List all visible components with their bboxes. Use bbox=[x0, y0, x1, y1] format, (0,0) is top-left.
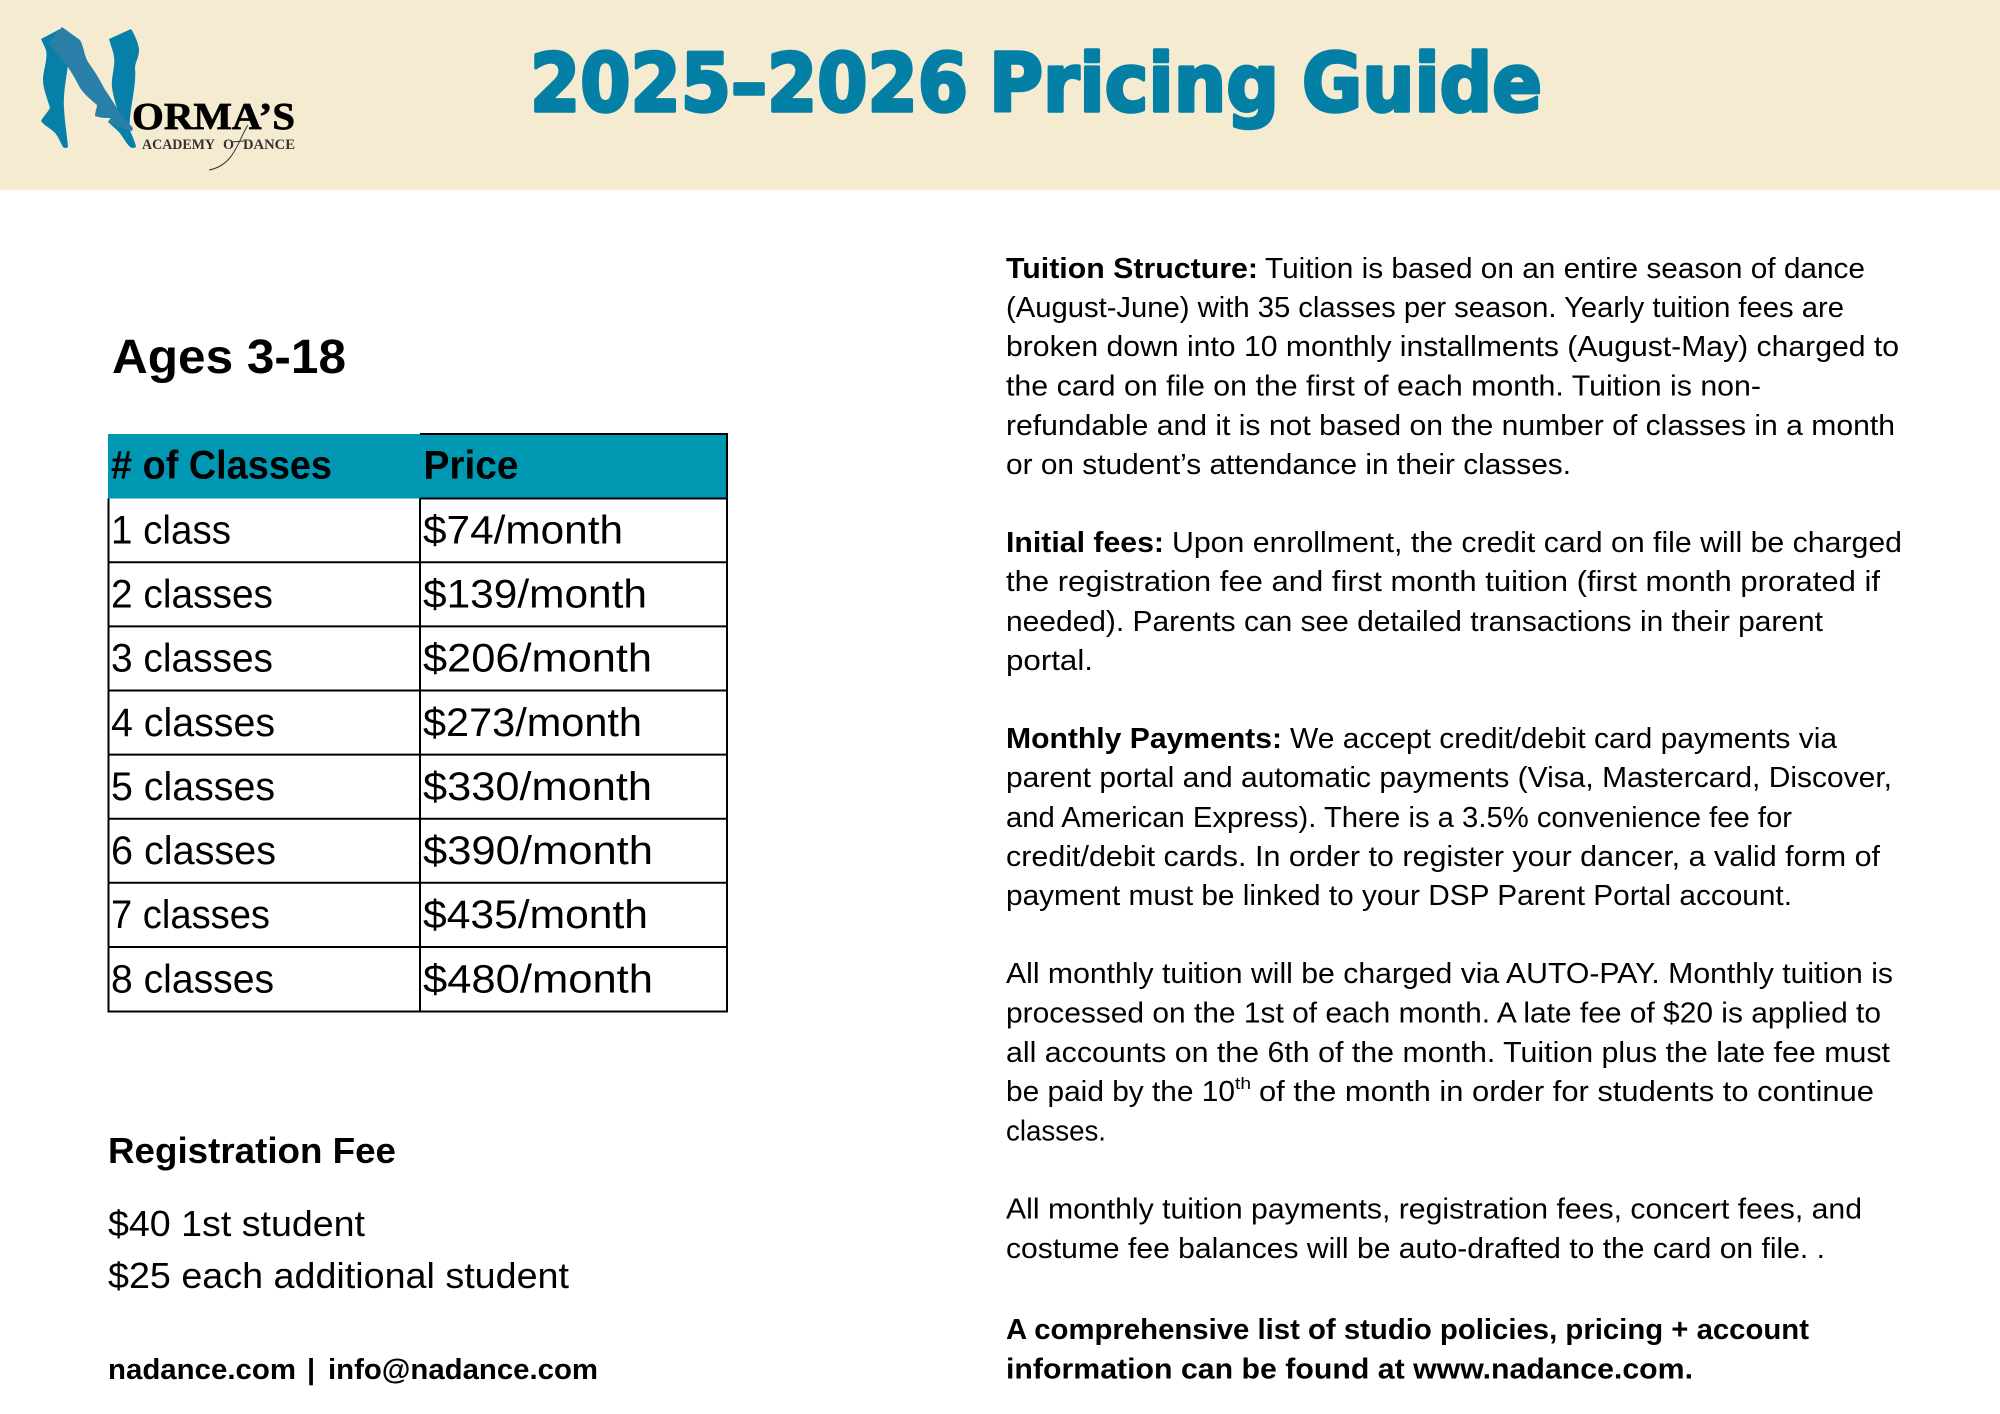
table header row bbox=[108, 434, 727, 498]
text block: monthly payments: credit/debit cards. In order to register your dancer, a valid form of bbox=[1006, 841, 1881, 873]
logo: Norma's Academy of Dance: O bbox=[223, 137, 234, 153]
text block: tuition structure: or on student’s attendance in their classes. bbox=[1006, 449, 1571, 481]
contact line: | bbox=[307, 1354, 315, 1386]
table rows: 4 classes bbox=[111, 701, 275, 745]
text block: policies note: A comprehensive list of studio policies, pricing + account bbox=[1006, 1314, 1809, 1346]
table rows: $139/month bbox=[423, 573, 647, 617]
text block: tuition structure: Tuition Structure: bbox=[1006, 253, 1258, 285]
text block: auto-draft: costume fee balances will be auto-drafted to the card on file. . bbox=[1006, 1233, 1825, 1265]
table rows: $480/month bbox=[423, 957, 653, 1001]
table rows: $330/month bbox=[423, 765, 652, 809]
table rows: 1 class bbox=[111, 508, 231, 552]
text block: tuition structure: broken down into 10 monthly installments (August-May) charged to bbox=[1006, 331, 1899, 363]
table header row: Price bbox=[424, 444, 518, 488]
table header row: # of Classes bbox=[111, 444, 332, 488]
logo: Norma's Academy of Dance: ACADEMY bbox=[142, 137, 215, 153]
heading: ages: Ages 3-18 bbox=[112, 331, 346, 384]
table rows: $273/month bbox=[423, 701, 642, 745]
title: Guide bbox=[1302, 37, 1542, 130]
table rows: 6 classes bbox=[111, 829, 276, 873]
table rows: 8 classes bbox=[111, 957, 274, 1001]
table rows: 2 classes bbox=[111, 573, 273, 617]
text block: initial fees bbox=[1006, 527, 1902, 677]
table grid bbox=[108, 498, 727, 1012]
table rows: 3 classes bbox=[111, 637, 273, 681]
text block: tuition structure: (August-June) with 35 classes per season. Yearly tuition fees are bbox=[1006, 292, 1844, 324]
registration fee: $40 1st student bbox=[108, 1203, 365, 1244]
title: Pricing bbox=[989, 37, 1279, 130]
registration fee bbox=[108, 1130, 569, 1296]
text block: tuition structure bbox=[1006, 253, 1899, 481]
logo: Norma's Academy of Dance: DANCE bbox=[243, 137, 295, 153]
text block: tuition structure: Tuition is based on an entire season of dance bbox=[1265, 253, 1865, 285]
text block: auto-draft bbox=[1006, 1193, 1862, 1265]
text block: auto-pay: processed on the 1st of each month. A late fee of $20 is applied to bbox=[1006, 997, 1881, 1029]
pricing table bbox=[108, 434, 727, 1012]
text block: auto-pay: classes. bbox=[1006, 1115, 1106, 1147]
contact line: nadance.com bbox=[108, 1354, 296, 1386]
text block: policies note: information can be found at www.nadance.com. bbox=[1006, 1354, 1693, 1386]
text block: initial fees: Initial fees: bbox=[1006, 527, 1164, 559]
logo: Norma's Academy of Dance bbox=[41, 27, 295, 170]
registration fee: Registration Fee bbox=[108, 1130, 396, 1171]
text block: monthly payments: We accept credit/debit card payments via bbox=[1290, 723, 1838, 755]
registration fee: $25 each additional student bbox=[108, 1255, 569, 1296]
text block: monthly payments: payment must be linked to your DSP Parent Portal account. bbox=[1006, 880, 1792, 912]
text block: initial fees: needed). Parents can see detailed transactions in their parent bbox=[1006, 606, 1823, 638]
logo: Norma's Academy of Dance: ORMA’S bbox=[132, 96, 295, 138]
text block: auto-pay: of the month in order for students to continue bbox=[1259, 1076, 1874, 1108]
contact line: info@nadance.com bbox=[328, 1354, 598, 1386]
text block: auto-pay: all accounts on the 6th of the month. Tuition plus the late fee must bbox=[1006, 1037, 1890, 1069]
header band bbox=[0, 0, 2000, 190]
table rows: $206/month bbox=[423, 637, 652, 681]
table rows: $74/month bbox=[423, 508, 623, 552]
text block: initial fees: portal. bbox=[1006, 645, 1093, 677]
text block: monthly payments bbox=[1006, 723, 1892, 912]
text block: initial fees: Upon enrollment, the credit card on file will be charged bbox=[1172, 527, 1902, 559]
text block: tuition structure: refundable and it is not based on the number of classes in a month bbox=[1006, 410, 1895, 442]
table rows: 5 classes bbox=[111, 765, 275, 809]
text block: monthly payments: parent portal and automatic payments (Visa, Mastercard, Discover, bbox=[1006, 762, 1892, 794]
text block: initial fees: the registration fee and first month tuition (first month prorated if bbox=[1006, 566, 1881, 598]
text block: tuition structure: the card on file on the first of each month. Tuition is non- bbox=[1006, 371, 1761, 403]
text block: monthly payments: Monthly Payments: bbox=[1006, 723, 1282, 755]
table rows: $435/month bbox=[423, 893, 648, 937]
contact line bbox=[108, 1354, 598, 1386]
text block: auto-pay: be paid by the 10 bbox=[1006, 1076, 1235, 1108]
table rows bbox=[111, 508, 653, 1001]
text block: auto-pay: All monthly tuition will be charged via AUTO-PAY. Monthly tuition is bbox=[1006, 958, 1893, 990]
title: 2025–2026 bbox=[530, 37, 968, 130]
table rows: 7 classes bbox=[111, 893, 270, 937]
text block: policies note bbox=[1006, 1314, 1809, 1386]
table rows: $390/month bbox=[423, 829, 653, 873]
text block: auto-pay: th bbox=[1235, 1074, 1251, 1093]
title bbox=[530, 37, 1542, 130]
text block: auto-draft: All monthly tuition payments, registration fees, concert fees, and bbox=[1006, 1193, 1862, 1225]
text block: auto-pay bbox=[1006, 958, 1893, 1147]
text block: monthly payments: and American Express). There is a 3.5% convenience fee for bbox=[1006, 802, 1792, 834]
